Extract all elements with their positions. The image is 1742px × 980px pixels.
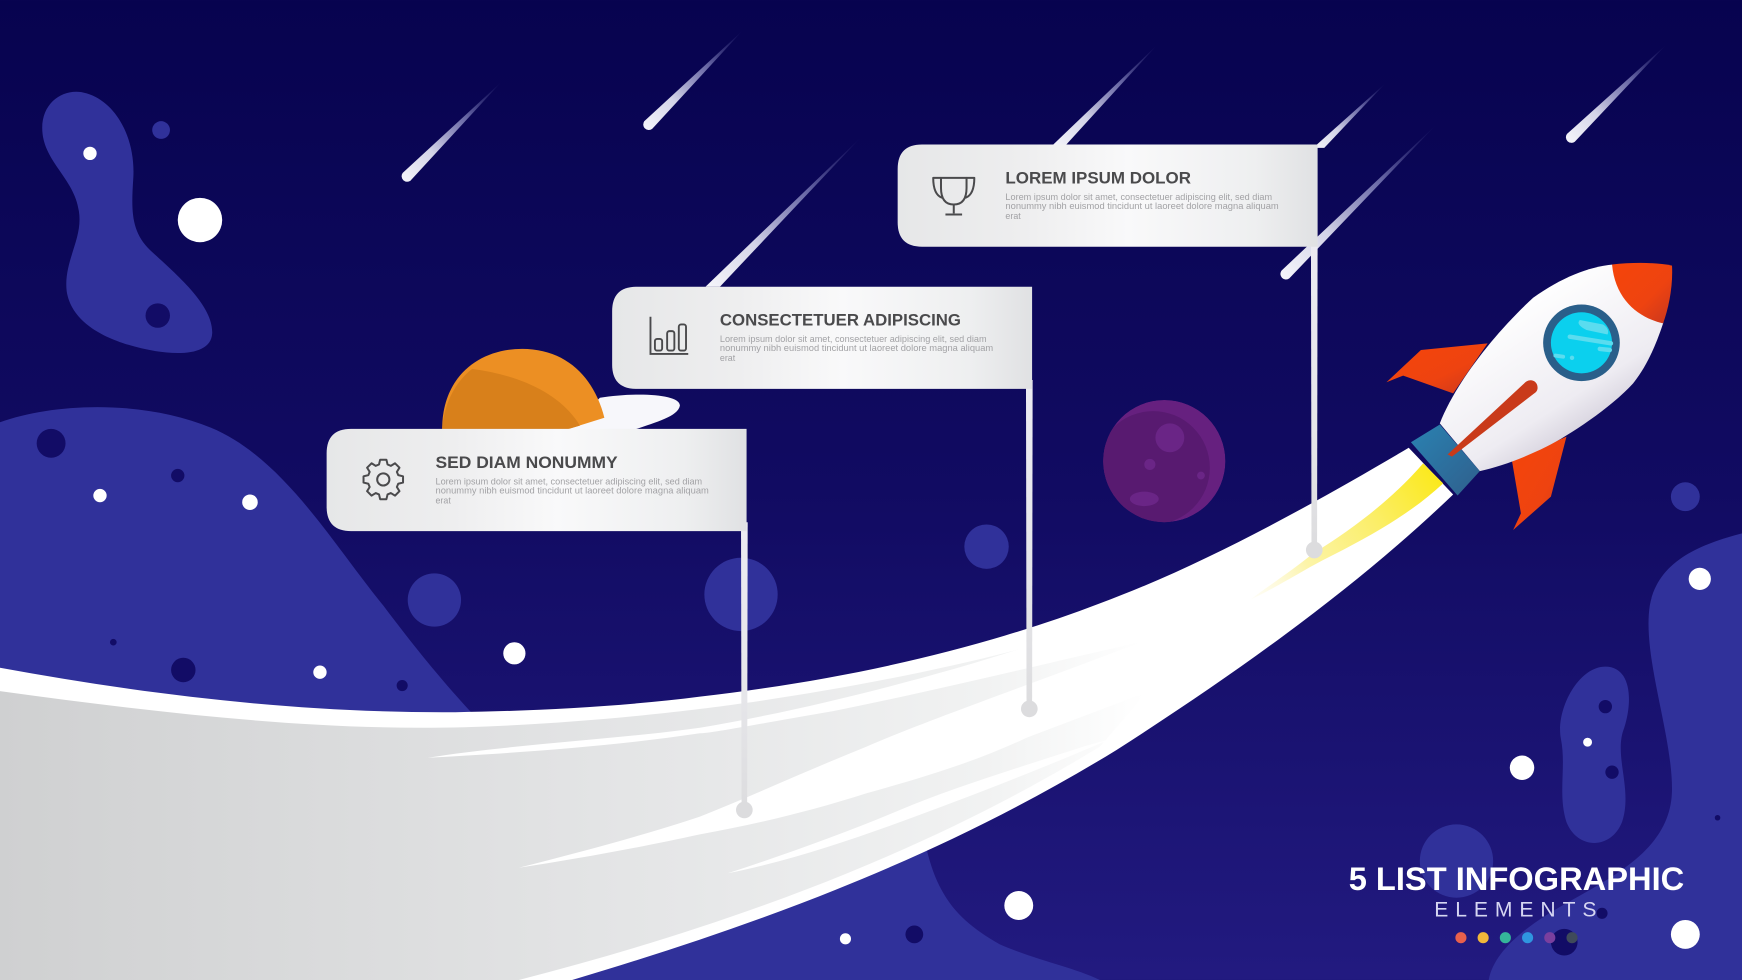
- colour dots: [1455, 932, 1578, 943]
- body text: [1005, 192, 1279, 221]
- body text: [435, 476, 709, 505]
- trail: yellow flame: [1250, 463, 1443, 600]
- icon: bar chart: [650, 317, 688, 354]
- trail: streak 2: [519, 639, 1155, 868]
- body text: nonummy nibh euismod tincidunt ut laoreet dolore magna aliquam: [720, 343, 993, 353]
- nose: [1612, 263, 1672, 323]
- blob: small right: [1560, 667, 1629, 843]
- trail: grey inner: [0, 628, 1150, 980]
- body text: erat: [1005, 211, 1021, 221]
- body text: erat: [720, 353, 736, 363]
- title: 5 LIST INFOGRAPHIC: [1349, 861, 1684, 897]
- icon: trophy: [933, 178, 974, 214]
- body text: Lorem ipsum dolor sit amet, consectetuer adipiscing elit, sed diam: [435, 476, 702, 486]
- blob: bottom right: [1489, 533, 1742, 980]
- subtitle: ELEMENTS: [1434, 899, 1596, 922]
- heading: SED DIAM NONUMMY: [435, 453, 618, 472]
- body text: erat: [435, 495, 451, 505]
- pointer stem 2: [1021, 380, 1038, 717]
- body text: Lorem ipsum dolor sit amet, consectetuer adipiscing elit, sed diam: [1005, 192, 1272, 202]
- window: [1543, 304, 1620, 381]
- planet: orange with ring: [442, 349, 680, 430]
- blob: bottom centre: [555, 849, 1100, 980]
- body text: [720, 334, 993, 363]
- collar: [1411, 424, 1480, 496]
- body text: nonummy nibh euismod tincidunt ut laoreet dolore magna aliquam: [435, 485, 709, 495]
- trail: streak 1: [428, 620, 1150, 758]
- panel: sed diam nonummy: [327, 429, 747, 531]
- panel: consectetuer adipiscing: [612, 287, 1032, 389]
- heading: LOREM IPSUM DOLOR: [1005, 168, 1191, 187]
- panel: lorem ipsum dolor: [898, 144, 1318, 247]
- pointer stem 3: [1306, 238, 1323, 558]
- icon: gear: [364, 460, 403, 499]
- title block: [1349, 861, 1684, 943]
- body text: nonummy nibh euismod tincidunt ut laoreet dolore magna aliquam: [1005, 201, 1279, 211]
- body: [1440, 264, 1671, 471]
- body text: Lorem ipsum dolor sit amet, consectetuer adipiscing elit, sed diam: [720, 334, 987, 344]
- pointer stem 1: [736, 522, 753, 818]
- rocket: [1386, 263, 1672, 530]
- meteors: [402, 30, 1666, 287]
- fin: lower: [1512, 437, 1566, 530]
- blob: top left: [42, 92, 212, 353]
- rocket trail: [0, 448, 1453, 980]
- fin: upper: [1386, 343, 1488, 393]
- stripe: [1448, 380, 1538, 457]
- trail: streak 3: [728, 739, 1111, 873]
- planet: purple: [1097, 400, 1225, 524]
- trail: white swoosh: [0, 448, 1453, 980]
- heading: CONSECTETUER ADIPISCING: [720, 311, 961, 330]
- blob: left hill: [0, 407, 472, 713]
